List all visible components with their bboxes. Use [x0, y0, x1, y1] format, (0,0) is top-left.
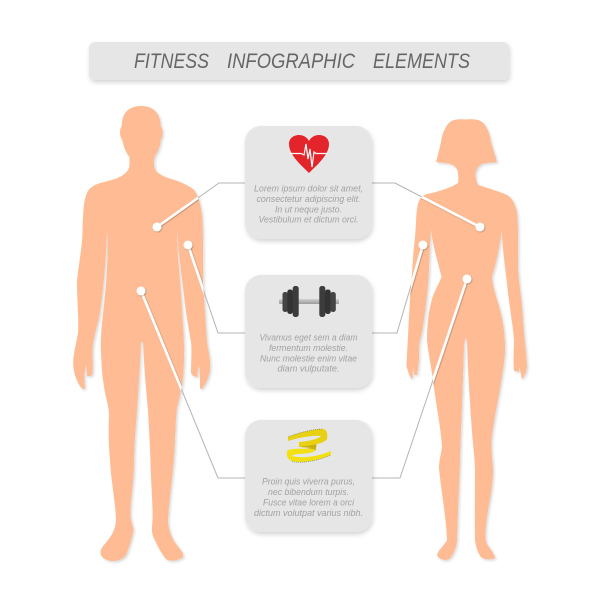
tape text: Proin quis viverra purus, — [262, 476, 355, 488]
icon: dumbbell — [279, 286, 339, 317]
male body silhouette — [73, 106, 210, 561]
marker dots — [136, 222, 484, 296]
dumbbell text: fermentum molestie. — [269, 343, 348, 354]
heart text: In ut neque justo. — [275, 204, 342, 216]
title — [134, 50, 470, 73]
panel: measuring tape — [245, 420, 372, 532]
dumbbell text — [260, 332, 358, 374]
connector lines — [141, 183, 480, 478]
female body silhouette — [406, 119, 527, 560]
title: ELEMENTS — [373, 50, 470, 73]
panel: heart — [245, 126, 372, 239]
heart text: Lorem ipsum dolor sit amet, — [254, 184, 363, 194]
dumbbell text: diam vulputate. — [278, 364, 340, 374]
tape text — [254, 476, 363, 519]
panel: dumbbell — [245, 275, 372, 388]
tape text: Fusce vitae lorem a orci — [263, 498, 355, 508]
tape text: nec bibendum turpis. — [268, 487, 349, 498]
title bar — [89, 42, 509, 80]
dumbbell text: Nunc molestie enim vitae — [260, 354, 357, 364]
heart text — [254, 184, 363, 226]
heart text: consectetur adipiscing elit. — [256, 194, 360, 205]
heart text: Vestibulum et dictum orci. — [258, 214, 358, 226]
dumbbell text: Vivamus eget sem a diam — [260, 332, 358, 344]
title: INFOGRAPHIC — [227, 50, 356, 73]
tape text: dictum volutpat varius nibh. — [254, 508, 363, 519]
icon: heart with pulse — [289, 135, 329, 173]
icon: measuring tape — [287, 429, 331, 462]
title: FITNESS — [134, 50, 209, 73]
